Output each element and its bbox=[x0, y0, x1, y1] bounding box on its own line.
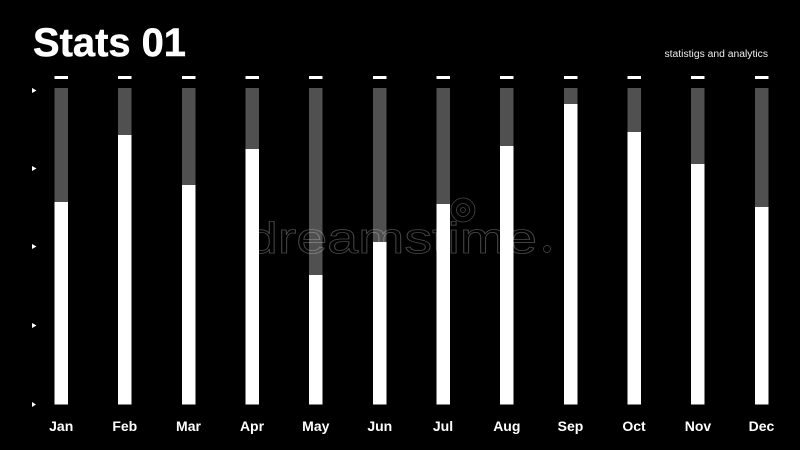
bar: May bbox=[302, 76, 330, 434]
bar: Dec: Dec bbox=[749, 418, 775, 434]
bar: Jul bbox=[433, 76, 453, 434]
subtitle: statistigs and analytics bbox=[664, 49, 768, 60]
bar: Apr bbox=[240, 76, 265, 434]
bar: Feb: Feb bbox=[112, 418, 137, 434]
bar: Oct: Oct bbox=[622, 418, 646, 434]
bar: Feb bbox=[112, 76, 137, 434]
bar: Aug: Aug bbox=[493, 418, 520, 434]
bar: Mar: Mar bbox=[176, 418, 201, 434]
bar: Apr: Apr bbox=[240, 418, 265, 434]
bar: Nov bbox=[685, 76, 711, 434]
bar: Jul: Jul bbox=[433, 418, 453, 434]
watermark: dreamstime bbox=[247, 214, 537, 263]
bar: Jan bbox=[49, 76, 73, 434]
bar: Sep: Sep bbox=[558, 418, 583, 434]
axis tick markers bbox=[32, 88, 36, 407]
watermark bbox=[247, 198, 550, 263]
bar: Oct bbox=[622, 76, 646, 434]
bar: Jun: Jun bbox=[367, 418, 392, 434]
bar: Dec bbox=[749, 76, 775, 434]
bar: May: May bbox=[302, 418, 330, 434]
bar: Nov: Nov bbox=[685, 418, 711, 434]
bar: Aug bbox=[493, 76, 520, 434]
bar chart bbox=[49, 76, 775, 434]
bar: Mar bbox=[176, 76, 201, 434]
bar: Sep bbox=[558, 76, 583, 434]
bar: Jun bbox=[367, 76, 392, 434]
title: Stats 01 bbox=[33, 21, 186, 65]
bar: Jan: Jan bbox=[49, 418, 73, 434]
